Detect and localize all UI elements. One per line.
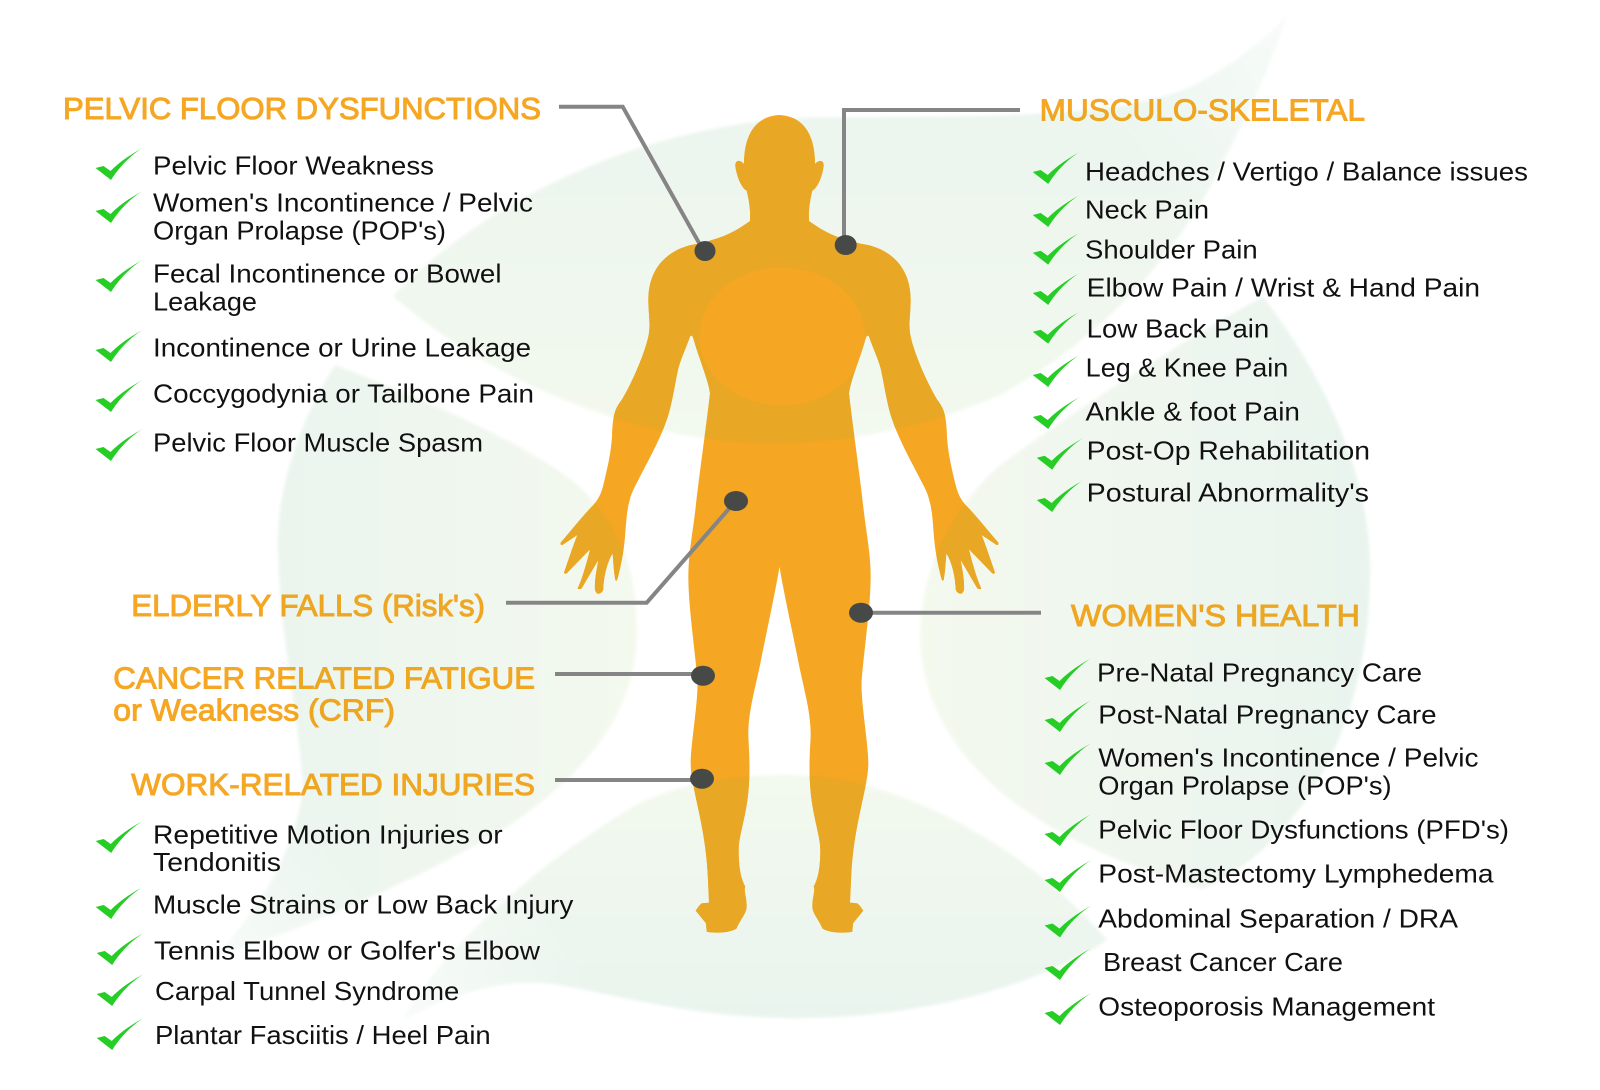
leader line: women's health (849, 603, 1041, 623)
item: coccygodynia: Coccygodynia or Tailbone Pain (153, 378, 534, 408)
item: ankle and foot pain: Ankle & foot Pain (1086, 396, 1300, 426)
item: low back pain: Low Back Pain (1087, 313, 1269, 343)
item: breast cancer care: Breast Cancer Care (1103, 947, 1343, 977)
item: muscle strains: Muscle Strains or Low Back Injury (153, 889, 573, 919)
leader line: pelvic floor dysfunctions (559, 107, 716, 261)
item: postural abnormality: Postural Abnormality's (1087, 478, 1369, 508)
item: leg and knee pain: Leg & Knee Pain (1086, 353, 1288, 383)
item: post-natal: Post-Natal Pregnancy Care (1098, 699, 1437, 729)
item: repetitive motion: Repetitive Motion Injuries or (153, 819, 503, 849)
item: ankle and foot pain (1033, 396, 1300, 429)
item: post-op rehabilitation: Post-Op Rehabilitation (1087, 435, 1370, 465)
item: women's incontinence (1044, 742, 1478, 800)
item: women's incontinence: Women's Incontinence / Pelvic (1098, 742, 1478, 772)
item: shoulder pain: Shoulder Pain (1085, 234, 1258, 264)
item: carpal tunnel: Carpal Tunnel Syndrome (155, 976, 459, 1006)
heading: elderly falls: ELDERLY FALLS (Risk's) (131, 588, 485, 623)
item: repetitive motion: Tendonitis (153, 847, 281, 877)
item: repetitive motion (96, 819, 503, 877)
heading: cancer related fatigue (113, 660, 535, 728)
leader line: work-related injuries (555, 769, 714, 789)
item: post-mastectomy: Post-Mastectomy Lymphedema (1098, 858, 1494, 888)
item: women's incontinence (96, 187, 533, 245)
item: fecal incontinence: Fecal Incontinence or Bowel (153, 259, 502, 289)
item: urine leakage: Incontinence or Urine Leakage (153, 333, 531, 363)
heading: women's health: WOMEN'S HEALTH (1071, 598, 1360, 633)
item: pelvic floor dysfunctions: Pelvic Floor Dysfunctions (PFD's) (1098, 814, 1509, 844)
item: women's incontinence: Organ Prolapse (POP's) (1098, 770, 1392, 800)
item: postural abnormality (1037, 478, 1369, 512)
heading: cancer related fatigue: or Weakness (CRF) (113, 692, 395, 728)
heading: cancer related fatigue: CANCER RELATED FATIGUE (113, 660, 535, 696)
item: abdominal separation: Abdominal Separation / DRA (1098, 903, 1459, 933)
item: osteoporosis: Osteoporosis Management (1098, 991, 1436, 1021)
background leaves (213, 15, 1370, 1020)
item: women's incontinence: Women's Incontinence / Pelvic (153, 187, 533, 217)
heading: musculo-skeletal: MUSCULO-SKELETAL (1040, 93, 1365, 128)
panel: musculo-skeletal (1033, 93, 1528, 512)
leader line: elderly falls (506, 491, 748, 603)
panel: work-related injuries (96, 767, 573, 1050)
chest highlight (699, 268, 865, 406)
item: plantar fasciitis: Plantar Fasciitis / Heel Pain (155, 1020, 491, 1050)
item: pre-natal: Pre-Natal Pregnancy Care (1097, 658, 1422, 688)
item: women's incontinence: Organ Prolapse (POP's) (153, 215, 446, 245)
item: leg and knee pain (1033, 353, 1288, 387)
leader line: cancer related fatigue (555, 666, 715, 686)
item: neck pain: Neck Pain (1085, 194, 1209, 224)
heading: pelvic floor dysfunctions: PELVIC FLOOR DYSFUNCTIONS (63, 91, 541, 126)
human body silhouette (560, 115, 998, 933)
heading: work-related injuries: WORK-RELATED INJURIES (131, 767, 535, 802)
item: tennis elbow: Tennis Elbow or Golfer's Elbow (154, 935, 540, 965)
leader line: musculo-skeletal (835, 110, 1020, 255)
panel: pelvic floor dysfunctions (63, 91, 541, 461)
item: neck pain (1033, 194, 1209, 227)
item: low back pain (1033, 312, 1269, 344)
item: post-op rehabilitation (1037, 435, 1370, 470)
item: pelvic floor weakness: Pelvic Floor Weakness (153, 150, 434, 180)
item: fecal incontinence: Leakage (153, 286, 257, 316)
item: muscle spasm: Pelvic Floor Muscle Spasm (153, 428, 483, 458)
item: fecal incontinence (96, 259, 502, 316)
panel: women's health (1044, 598, 1509, 1025)
item: shoulder pain (1033, 233, 1258, 265)
item: elbow pain: Elbow Pain / Wrist & Hand Pain (1087, 273, 1480, 303)
item: headaches: Headches / Vertigo / Balance issues (1085, 157, 1528, 187)
item: breast cancer care (1044, 947, 1343, 980)
